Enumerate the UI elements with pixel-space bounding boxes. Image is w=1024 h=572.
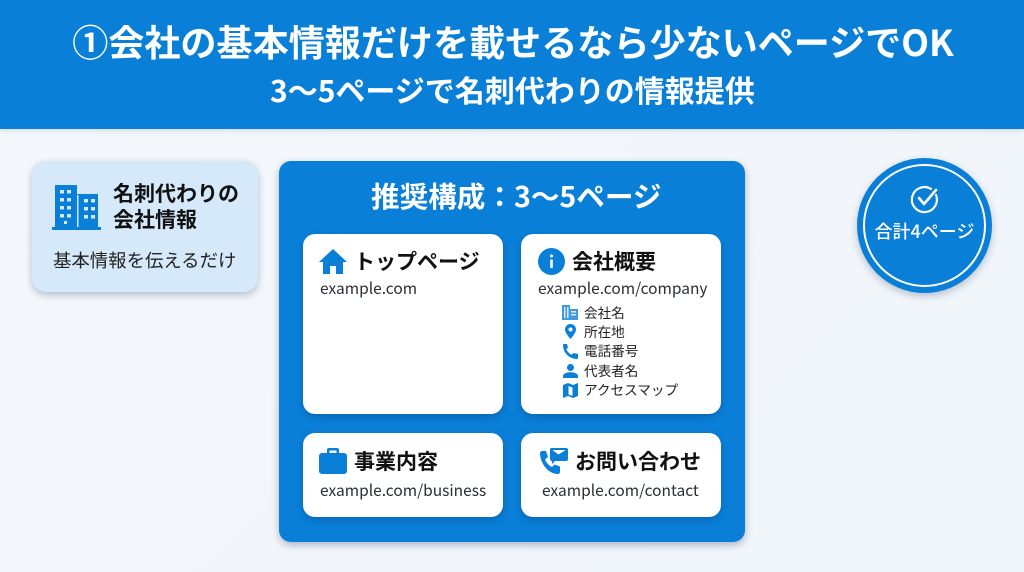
card heading: 会社概要 bbox=[572, 246, 656, 276]
icon: check bbox=[910, 186, 938, 214]
card heading: トップページ bbox=[354, 246, 480, 276]
card: company profile bbox=[521, 234, 721, 414]
url: example.com/contact bbox=[542, 479, 699, 501]
panel: business card info bbox=[32, 161, 258, 292]
list text: access map: アクセスマップ bbox=[584, 379, 678, 399]
icon: map bbox=[563, 383, 578, 398]
panel: recommended structure bbox=[279, 161, 745, 542]
icon: building small bbox=[562, 305, 578, 320]
url: example.com bbox=[320, 277, 417, 299]
list text: representative: 代表者名 bbox=[584, 360, 638, 380]
card heading: 名刺代わりの bbox=[113, 178, 239, 208]
card text: 基本情報を伝えるだけ bbox=[53, 247, 236, 273]
url: example.com/business bbox=[320, 479, 486, 501]
icon: home bbox=[319, 249, 347, 274]
card: top page bbox=[303, 234, 503, 414]
badge: total pages bbox=[857, 158, 992, 293]
list text: address: 所在地 bbox=[584, 321, 625, 341]
card: business bbox=[303, 433, 503, 517]
card heading: お問い合わせ bbox=[575, 446, 701, 476]
card heading bbox=[113, 178, 239, 234]
list text: company name: 会社名 bbox=[584, 302, 625, 322]
icon: info bbox=[538, 248, 565, 275]
subtitle: 3〜5ページで名刺代わりの情報提供 bbox=[270, 67, 755, 111]
card heading: 事業内容 bbox=[354, 446, 438, 476]
icon: briefcase bbox=[319, 448, 347, 474]
card: contact bbox=[521, 433, 721, 517]
header banner bbox=[0, 0, 1024, 129]
icon: person bbox=[563, 364, 578, 378]
icon: phone bbox=[563, 344, 578, 359]
badge text: 合計4ページ bbox=[875, 218, 974, 244]
title: ①会社の基本情報だけを載せるなら少ないページでOK bbox=[72, 15, 954, 67]
icon: building bbox=[52, 185, 101, 230]
badge ring bbox=[863, 164, 986, 287]
panel heading: 推奨構成：3〜5ページ bbox=[371, 175, 662, 216]
list text: phone number: 電話番号 bbox=[584, 340, 638, 360]
icon: phone and mail bbox=[540, 448, 568, 474]
icon: location pin bbox=[565, 324, 576, 339]
card heading: 会社情報 bbox=[113, 204, 197, 234]
url: example.com/company bbox=[538, 277, 708, 299]
